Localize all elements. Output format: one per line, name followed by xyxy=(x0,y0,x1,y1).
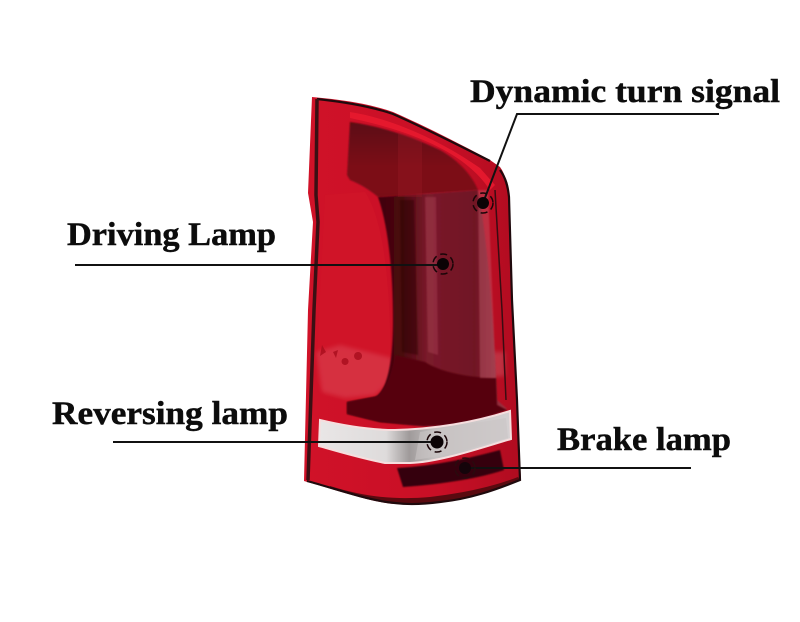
label: dynamic turn signal xyxy=(470,74,780,213)
label: driving lamp xyxy=(67,217,453,274)
label: brake lamp: Brake lamp xyxy=(557,422,731,458)
label: dynamic turn signal: Dynamic turn signal xyxy=(470,74,780,110)
pale reflection bands xyxy=(316,345,392,398)
tail lamp illustration xyxy=(304,97,521,504)
label: reversing lamp xyxy=(52,396,447,452)
reflection spots xyxy=(320,345,485,365)
bottom dark band xyxy=(330,477,520,504)
label: driving lamp: Driving Lamp xyxy=(67,217,276,253)
upper dark window xyxy=(347,122,478,197)
upper edge highlight band xyxy=(350,112,495,190)
label: reversing lamp: Reversing lamp xyxy=(52,396,288,432)
lower dark band xyxy=(347,355,507,426)
lamp housing xyxy=(304,97,521,504)
left red panel shading xyxy=(316,192,390,401)
label: brake lamp xyxy=(455,422,731,478)
white reversing lens xyxy=(319,411,511,463)
vertical light streaks xyxy=(425,197,438,355)
central dark panel xyxy=(347,190,507,426)
housing dark outline xyxy=(307,99,520,504)
dark brake lens xyxy=(397,450,504,487)
